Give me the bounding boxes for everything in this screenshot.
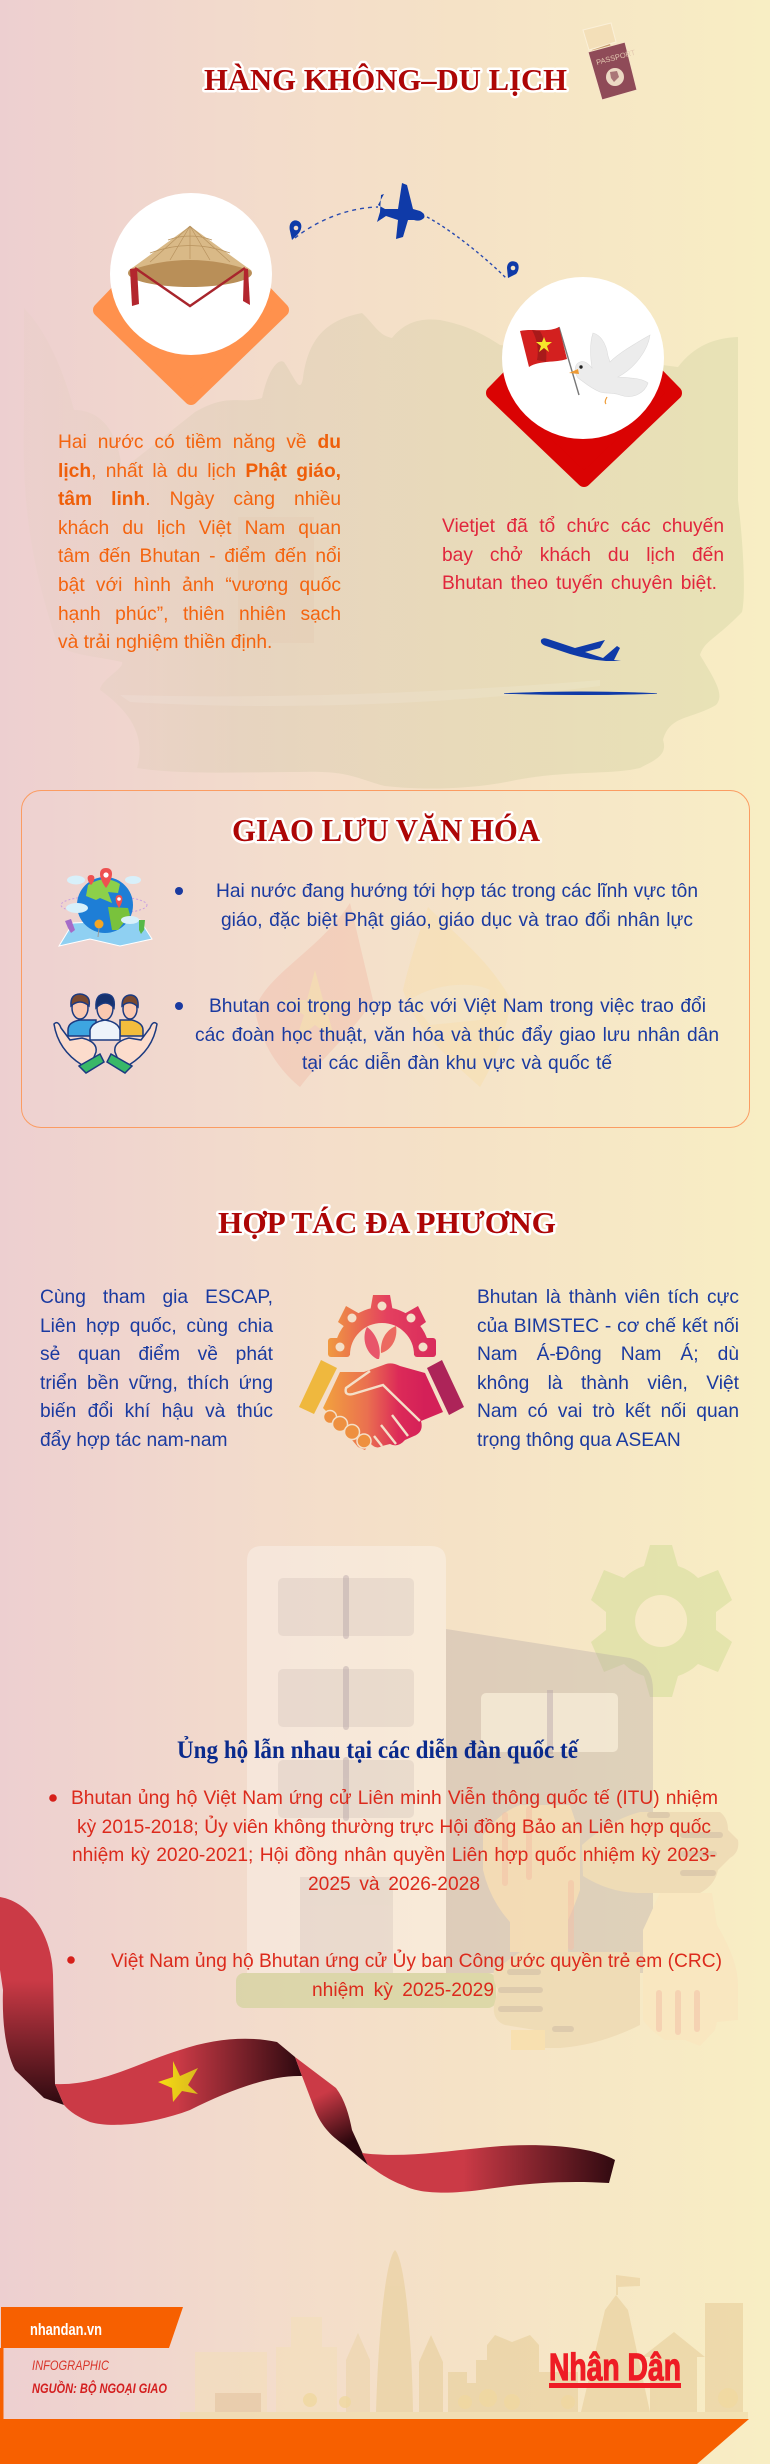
- text: BIMSTEC and ASEAN: Nam có vai trò kết nối quan: [477, 1401, 739, 1422]
- text: tourism potential: tâm linh. Ngày càng nhiều: [58, 489, 341, 510]
- text: Vietjet flights: Bhutan theo tuyến chuyên biệt.: [442, 573, 717, 594]
- text: tourism potential: Hai nước có tiềm năng về du: [58, 432, 341, 453]
- bullet: [175, 1002, 183, 1010]
- logo: Nhân Dân: Nhân Dân: [549, 2347, 681, 2389]
- text: BIMSTEC and ASEAN: Nam Á-Đông Nam Á; dù: [477, 1344, 739, 1365]
- icon: location pin with conical hat: [100, 193, 282, 398]
- text: ESCAP and UN cooperation: Cùng tham gia ESCAP,: [40, 1287, 273, 1308]
- text: Bhutan supports Vietnam: [71, 1787, 718, 1895]
- text: ESCAP and UN cooperation: Liên hợp quốc, cùng chia: [40, 1316, 273, 1337]
- text: Bhutan supports Vietnam: kỳ 2015-2018; Ủy viên không thường trực Hội đồng Bảo an Liên hợp quốc: [77, 1817, 711, 1838]
- left rule: [0, 2348, 4, 2419]
- background: mountain monastery silhouette: [24, 308, 744, 788]
- text: tourism potential: tâm đến Bhutan - điểm đến nổi: [58, 546, 341, 567]
- text: tourism potential: và trải nghiệm thiền định.: [58, 632, 272, 653]
- site name: nhandan.vn: [30, 2320, 102, 2339]
- icon: passport: PASSPORT: [595, 48, 637, 67]
- text: religion, education and human resources cooperation: [216, 881, 698, 931]
- text: Vietnam supports Bhutan: nhiệm kỳ 2025-2029: [312, 1980, 494, 2001]
- text: ESCAP and UN cooperation: triển bền vững, thích ứng: [40, 1373, 273, 1394]
- icon: gear, leaves and handshake: [299, 1295, 464, 1450]
- text: ESCAP and UN cooperation: sẻ quan điểm về phát: [40, 1344, 273, 1365]
- orange tag: [1, 2307, 183, 2348]
- title: HÀNG KHÔNG–DU LỊCH: [204, 62, 567, 97]
- text: Vietnam supports Bhutan: [111, 1950, 722, 2001]
- icon: flight route with airplane: [290, 183, 519, 278]
- icon: passport: [583, 23, 637, 100]
- text: Bhutan supports Vietnam: 2025 và 2026-2028: [308, 1874, 480, 1895]
- subheading: mutual support: Ủng hộ lẫn nhau tại các diễn đàn quốc tế: [177, 1736, 580, 1764]
- text: academic and cultural exchanges: Bhutan coi trọng hợp tác với Việt Nam trong việc trao đổi: [209, 996, 706, 1017]
- text: ESCAP and UN cooperation: đẩy hợp tác nam-nam: [40, 1430, 228, 1451]
- icon: airplane taking off: [504, 638, 657, 695]
- background: faint flags of Vietnam and Bhutan: [255, 903, 511, 1087]
- source: NGUỒN: BỘ NGOẠI GIAO: [32, 2379, 167, 2396]
- text: BIMSTEC and ASEAN: của BIMSTEC - cơ chế kết nối: [477, 1316, 739, 1337]
- panel: cultural exchange: [21, 790, 750, 1128]
- text: Vietjet flights: Vietjet đã tổ chức các chuyến: [442, 516, 724, 537]
- orange footer band: [0, 2419, 749, 2464]
- background: city skyline: [180, 2250, 748, 2419]
- text: BIMSTEC and ASEAN: Bhutan là thành viên tích cực: [477, 1287, 739, 1308]
- text: religion, education and human resources cooperation: Hai nước đang hướng tới hợp tác trong các lĩnh vực tôn: [216, 881, 698, 902]
- text: ESCAP and UN cooperation: biến đổi khí hậu và thúc: [40, 1401, 273, 1422]
- text: tourism potential: hạnh phúc”, thiên nhiên sạch: [58, 604, 341, 625]
- text: ESCAP and UN cooperation: [40, 1287, 274, 1451]
- footer: [0, 2307, 749, 2464]
- text: tourism potential: khách du lịch Việt Nam quan: [58, 518, 341, 539]
- panel: mutual support at international forums: [49, 1736, 722, 2001]
- text: Vietjet flights: bay chở khách du lịch đến: [442, 545, 724, 566]
- bullet: [175, 887, 183, 895]
- text: academic and cultural exchanges: tại các diễn đàn khu vực và quốc tế: [302, 1053, 612, 1074]
- text: BIMSTEC and ASEAN: [477, 1287, 739, 1451]
- background: building, gear and hands: [236, 1545, 738, 2050]
- label: infographic: INFOGRAPHIC: [32, 2357, 110, 2373]
- panel: aviation and tourism: [58, 22, 724, 695]
- text: tourism potential: bật với hình ảnh “vương quốc: [58, 575, 341, 596]
- text: tourism potential: lịch, nhất là du lịch Phật giáo,: [58, 461, 341, 482]
- text: Vietnam supports Bhutan: Việt Nam ủng hộ Bhutan ứng cử Ủy ban Công ước quyền trẻ em (CRC): [111, 1951, 722, 1972]
- text: BIMSTEC and ASEAN: trọng thông qua ASEAN: [477, 1430, 681, 1451]
- text: religion, education and human resources cooperation: giáo, đặc biệt Phật giáo, giáo dục và trao đổi nhân lực: [221, 910, 693, 931]
- text: BIMSTEC and ASEAN: không là thành viên, Việt: [477, 1373, 739, 1394]
- text: Bhutan supports Vietnam: nhiệm kỳ 2020-2021; Hội đồng nhân quyền Liên hợp quốc nhiệm kỳ 2023-: [72, 1845, 716, 1866]
- text: Vietjet flights: [442, 516, 724, 594]
- heading: multilateral cooperation: HỢP TÁC ĐA PHƯƠNG: [218, 1205, 556, 1240]
- icon: people in open hands: [54, 994, 157, 1073]
- text: academic and cultural exchanges: các đoàn học thuật, văn hóa và thúc đẩy giao lưu nhân dân: [195, 1025, 719, 1046]
- heading: cultural exchange: GIAO LƯU VĂN HÓA: [232, 812, 540, 848]
- text: Bhutan supports Vietnam: Bhutan ủng hộ Việt Nam ứng cử Liên minh Viễn thông quốc tế (ITU) nhiệm: [71, 1788, 718, 1809]
- bullet: [49, 1794, 57, 1802]
- bullet: [67, 1956, 75, 1964]
- text: academic and cultural exchanges: [195, 996, 719, 1074]
- icon: globe and map: [59, 868, 152, 946]
- panel: multilateral cooperation: [40, 1204, 739, 1451]
- icon: location pin with flag and dove: [493, 277, 675, 480]
- text: tourism potential: [58, 432, 341, 653]
